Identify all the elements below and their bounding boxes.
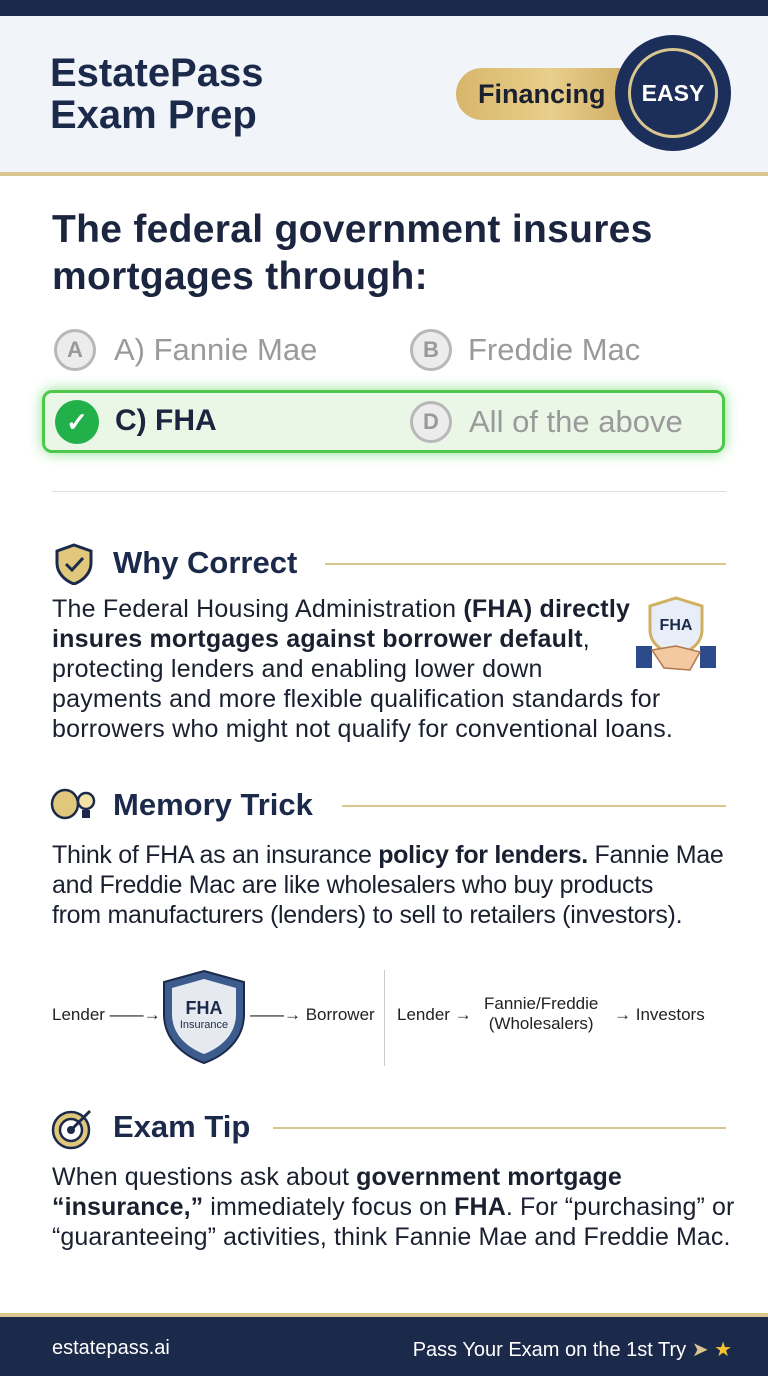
question: mortgages through: — [52, 255, 428, 298]
option B — [410, 329, 640, 371]
icon: FHA insurance shield: FHA — [186, 998, 222, 1018]
correct answer box: All of the above — [469, 404, 683, 439]
why correct text: borrowers who might not qualify for conventional loans. — [52, 715, 673, 743]
why correct text: payments and more flexible qualification standards for — [52, 685, 660, 713]
option A: A) Fannie Mae — [114, 332, 317, 367]
diagram — [52, 970, 705, 1066]
why correct text: protecting lenders and enabling lower down — [52, 655, 543, 683]
footer — [0, 1313, 768, 1376]
correct answer box: D — [423, 409, 439, 434]
why correct text: The Federal Housing Administration (FHA) directly — [52, 595, 630, 623]
logo text: EstatePass — [50, 51, 263, 95]
option B: B — [423, 337, 439, 362]
top bar — [0, 0, 768, 16]
exam tip text: “guaranteeing” activities, think Fannie Mae and Freddie Mac. — [52, 1223, 731, 1251]
check icon: ✓ — [66, 407, 88, 437]
exam tip text — [52, 1163, 734, 1251]
icon: target — [52, 1110, 91, 1150]
why correct text — [52, 595, 673, 743]
icon: FHA insurance shield — [163, 970, 245, 1064]
icon: FHA handshake: FHA — [660, 617, 693, 634]
icon: FHA handshake — [636, 596, 716, 671]
icon: brain bulb — [50, 788, 96, 820]
why correct text: insures mortgages against borrower default, — [52, 625, 590, 653]
footer: Pass Your Exam on the 1st Try ➤ ★ — [413, 1339, 732, 1361]
logo text: Exam Prep — [50, 93, 257, 137]
category pill — [456, 68, 646, 120]
diagram: Fannie/Freddie — [484, 994, 598, 1013]
icon: FHA insurance shield: Insurance — [180, 1019, 228, 1031]
diagram: Lender ——→ — [52, 1005, 161, 1024]
memory trick text: and Freddie Mac are like wholesalers who buy products — [52, 871, 653, 899]
memory trick text — [52, 841, 724, 929]
logo text — [50, 51, 263, 137]
exam tip text: “insurance,” immediately focus on FHA. For “purchasing” or — [52, 1193, 734, 1221]
difficulty badge: EASY — [642, 80, 704, 106]
heading: memory trick: Memory Trick — [113, 787, 313, 822]
option A — [54, 329, 317, 371]
icon: shield — [56, 543, 92, 585]
correct answer box — [42, 390, 725, 453]
check icon — [55, 400, 99, 444]
option A: A — [67, 337, 83, 362]
correct answer box: C) FHA — [115, 404, 217, 437]
option B: Freddie Mac — [468, 332, 640, 367]
diagram: Lender → — [397, 1005, 472, 1024]
heading: why correct: Why Correct — [113, 545, 297, 580]
heading: exam tip: Exam Tip — [113, 1109, 250, 1144]
diagram: → Investors — [614, 1005, 705, 1024]
exam tip text: When questions ask about government mortgage — [52, 1163, 622, 1191]
question — [52, 208, 653, 298]
memory trick text: Think of FHA as an insurance policy for lenders. Fannie Mae — [52, 841, 724, 869]
difficulty badge — [620, 40, 726, 146]
header — [0, 16, 768, 176]
diagram: ——→ Borrower — [250, 1005, 375, 1024]
diagram: (Wholesalers) — [489, 1014, 594, 1033]
question: The federal government insures — [52, 208, 653, 251]
category pill: Financing — [478, 79, 606, 109]
memory trick text: from manufacturers (lenders) to sell to retailers (investors). — [52, 901, 682, 929]
footer: estatepass.ai — [52, 1337, 170, 1359]
